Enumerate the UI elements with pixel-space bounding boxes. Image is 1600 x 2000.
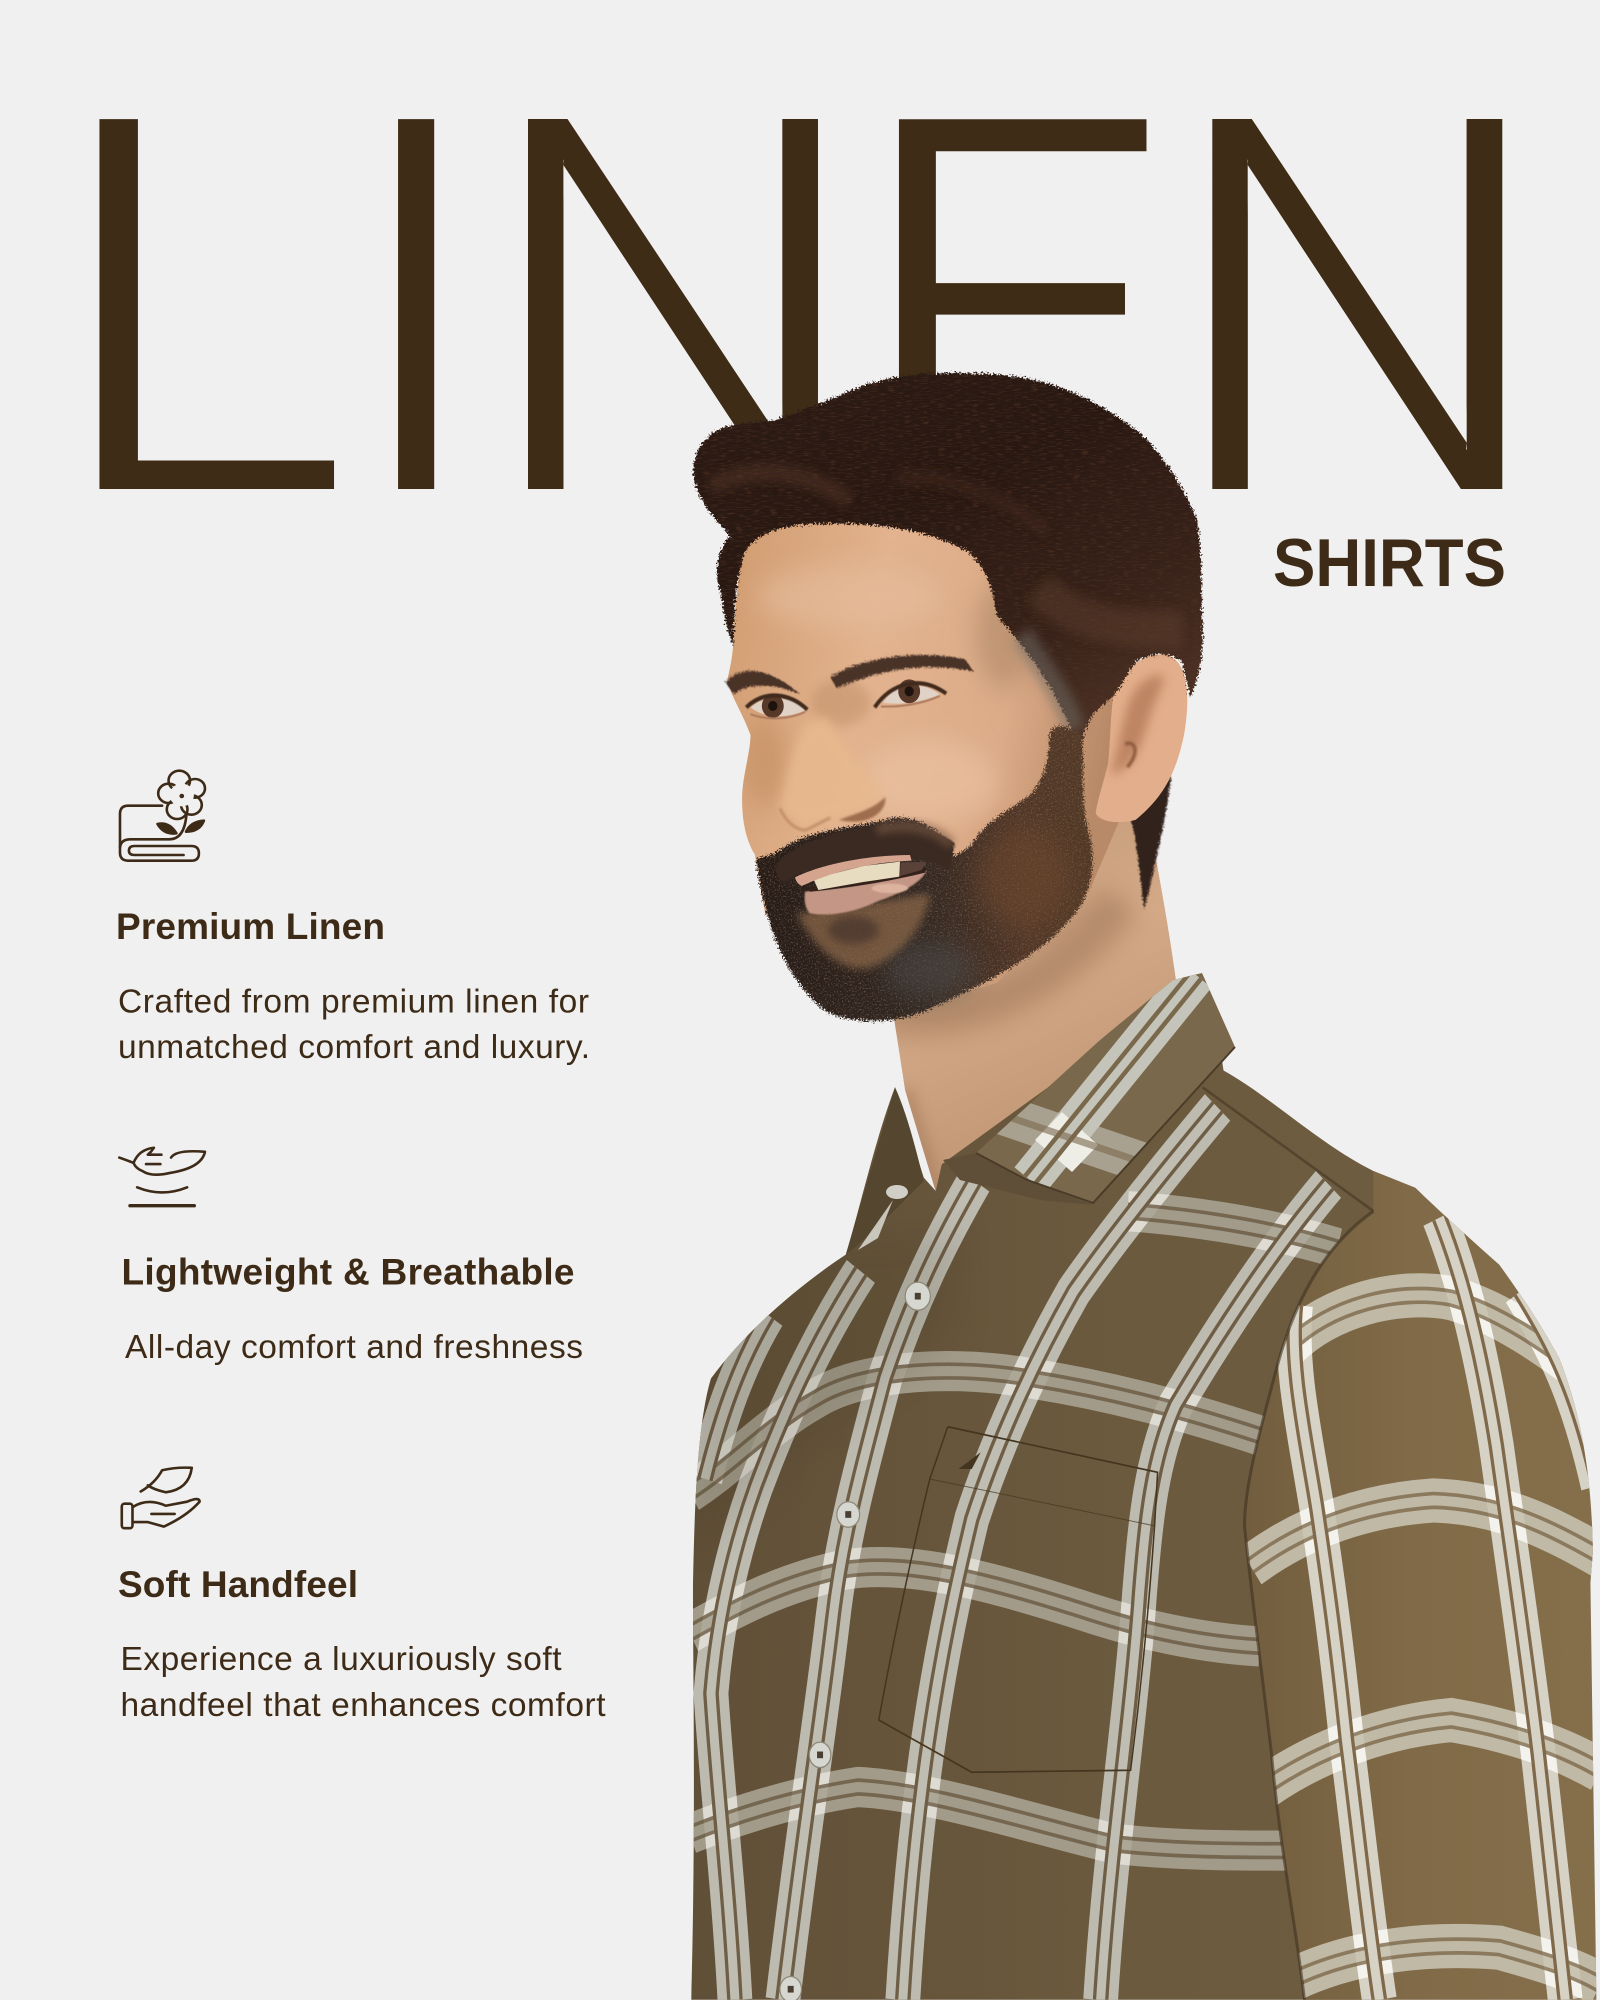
button thread [788,1293,921,1993]
chin tan patch [797,893,930,969]
beard grey tones [883,827,1068,997]
icon: fabric roll with flower [120,771,205,861]
shirt [691,1062,1596,2000]
description: Experience a luxuriously soft [120,1641,562,1678]
ear [1096,655,1187,822]
photo: man in plaid linen shirt [660,373,1600,2000]
title: LINEN [46,0,1550,615]
feature: Premium Linen [116,771,590,1066]
hair highlights [711,473,1182,730]
face skin [727,505,1127,1020]
subtitle: SHIRTS: SHIRTS [1273,525,1506,601]
neck hair behind ear [1123,767,1171,909]
description: unmatched comfort and luxury. [118,1029,590,1066]
icon: feather [119,1148,205,1206]
shirt torso [691,1062,1374,2000]
right collar [977,973,1235,1202]
feature: Lightweight & Breathable [119,1148,583,1366]
feature: Soft Handfeel [118,1468,606,1724]
title: LINEN: L [46,0,360,614]
teeth [813,862,900,890]
description [120,1641,606,1724]
heading: Lightweight & Breathable [122,1252,574,1292]
title: LINEN: N [480,0,865,610]
lower lip [805,870,927,915]
collar button [886,1185,908,1199]
face shading [744,565,1035,830]
mouth shadow [805,867,927,892]
beard [756,726,1092,1021]
moustache [775,825,955,882]
sleeve crossings [1285,1274,1582,1998]
head [693,373,1203,1021]
icon: hand with leaf [122,1468,200,1528]
yoke seam [1203,1087,1373,1211]
collar stand [943,1153,1093,1205]
heading: Premium Linen [116,906,385,947]
description: All-day comfort and freshness [125,1329,583,1366]
soul patch [828,916,878,944]
neck [894,820,1176,1191]
collar inner light gap [858,1200,893,1250]
collar crossing [1035,1112,1098,1172]
pocket logo [959,1452,981,1469]
title: LINEN: N [1165,0,1550,610]
mouth and moustache [775,825,955,969]
pocket flap stitch [930,1479,1155,1526]
dark back teeth [900,862,927,876]
lip highlight [872,884,908,893]
eyebrows [725,655,974,695]
upper lip [795,855,912,886]
plaid crossings [690,1211,1337,1851]
heading: Soft Handfeel [118,1564,358,1605]
title: LINEN: I [342,0,490,615]
title: LINEN: E [854,0,1182,611]
sleeve [1246,1171,1596,2000]
description [118,984,590,1066]
eyes [746,679,946,718]
moustache brown [877,826,952,845]
collar edge [976,1047,1235,1203]
sleeve seam [1245,1211,1373,2000]
left collar [846,1087,924,1255]
shirt buttons [780,1282,930,2000]
description: handfeel that enhances comfort [120,1687,606,1724]
hair [693,373,1203,744]
pocket [879,1427,1158,1772]
description: Crafted from premium linen for [118,984,589,1020]
